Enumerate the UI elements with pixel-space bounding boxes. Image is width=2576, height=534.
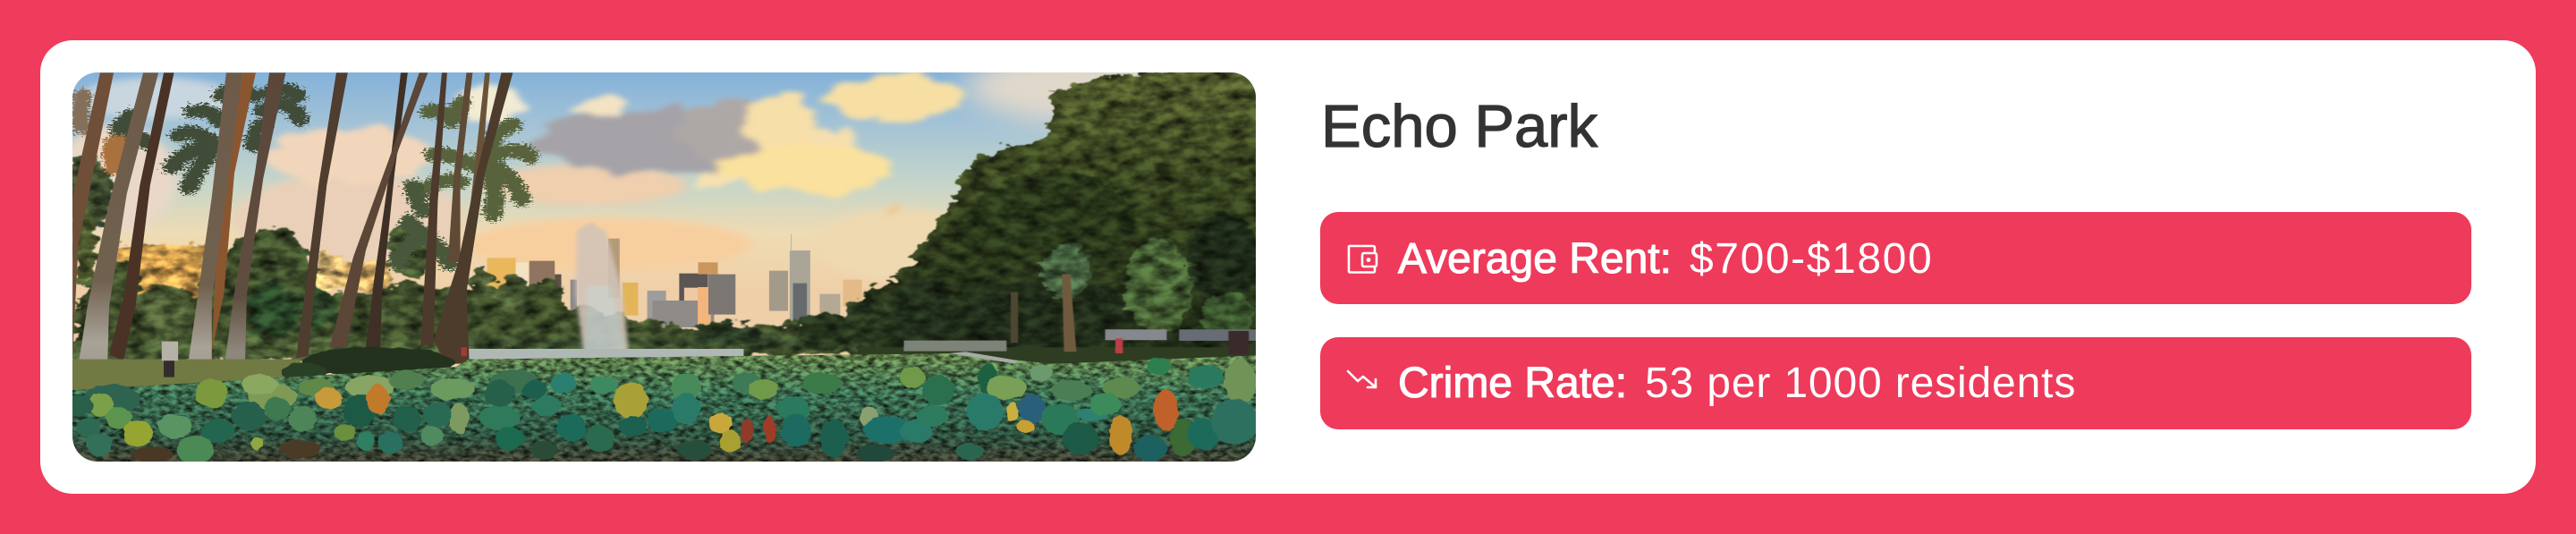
- lawn, shrubs and walker: [72, 342, 467, 390]
- downtown skyline: [487, 234, 862, 327]
- stat bar: crime rate: [1320, 337, 2471, 429]
- palm trunks: [72, 72, 513, 385]
- icon: trending down arrow: [1347, 370, 1377, 388]
- lake water: [469, 349, 744, 360]
- tree details and cars along the shore: [859, 275, 1269, 369]
- stat bar: average rent: [1320, 212, 2471, 304]
- sky: [72, 72, 1256, 375]
- fountain: [575, 222, 629, 353]
- label: crime rate: Crime Rate:: [1398, 360, 1627, 407]
- large trees, right: [694, 65, 1269, 358]
- palm fronds: [78, 87, 526, 261]
- lily pads field: [66, 352, 1269, 471]
- icon: wallet: [1347, 245, 1377, 274]
- palm trees: [72, 72, 526, 385]
- label: average rent: Average Rent:: [1398, 235, 1672, 283]
- value: rent range: $700-$1800: [1690, 235, 1933, 283]
- photo: Echo Park lake with palm trees and downtown skyline: [72, 72, 1256, 462]
- heading: Echo Park: [1321, 93, 1597, 160]
- background trees and buildings, left shore: [64, 152, 875, 360]
- value: crime figure: 53 per 1000 residents: [1645, 360, 2076, 407]
